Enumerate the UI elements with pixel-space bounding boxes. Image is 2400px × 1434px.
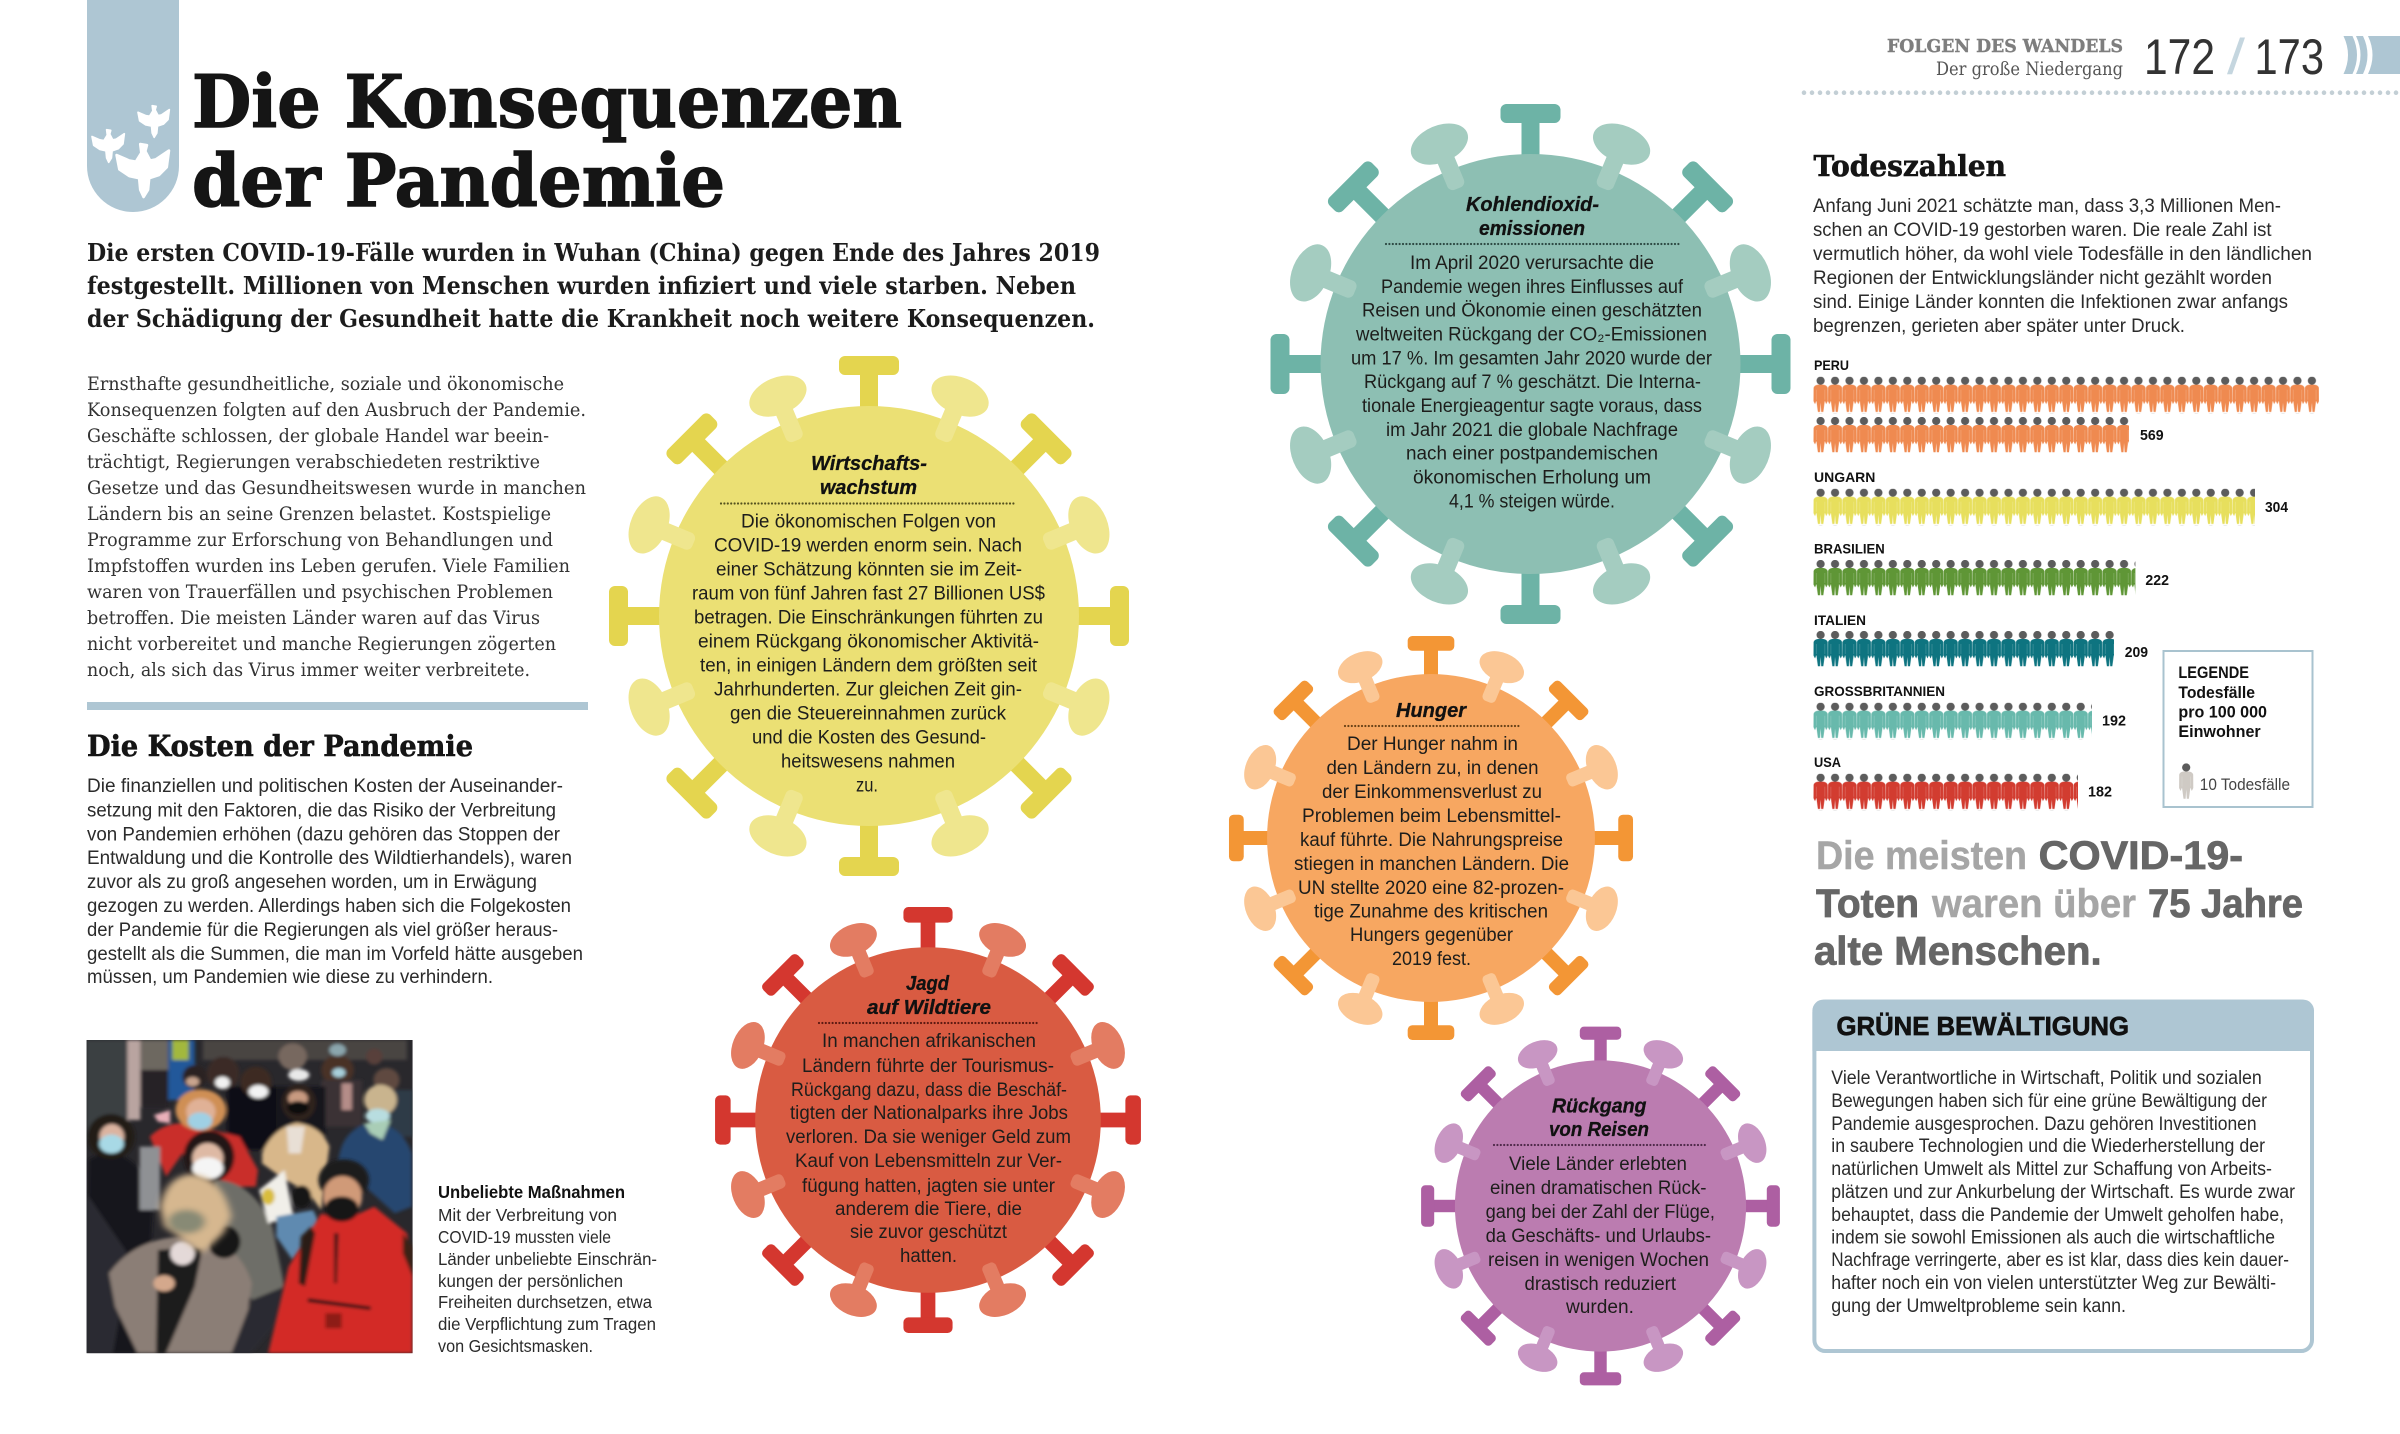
caption: Unbeliebte Maßnahmen: die Verpflichtung zum Tragen (438, 1314, 656, 1334)
virus text: Wirtschaftswachstum: zu. (856, 776, 878, 796)
virus text: Kohlendioxidemissionen: um 17 %. Im gesamten Jahr 2020 wurde der (1351, 348, 1713, 370)
pictogram chart: deaths per 100000 (1813, 357, 2319, 811)
panel text: gung der Umweltprobleme sein kann. (1831, 1296, 2126, 1317)
virus text: Jagd auf Wildtiere: Jagd (906, 973, 950, 995)
text: costs paragraph: von Pandemien erhöhen (dazu gehören das Stoppen der (87, 824, 560, 846)
panel: Grüne Bewältigung (1812, 1000, 2314, 1351)
text: costs paragraph: zuvor als zu groß angesehen worden, um in Erwägung (87, 871, 537, 893)
callout: oldest victims statement: alte Menschen. (1814, 930, 2102, 974)
virus text: Rückgang von Reisen: Viele Länder erlebten (1509, 1154, 1687, 1175)
virus text: Rückgang von Reisen: wurden. (1565, 1297, 1634, 1318)
virus text: Wirtschaftswachstum: gen die Steuereinnahmen zurück (730, 704, 1006, 724)
body paragraph: Programme zur Erforschung von Behandlungen und (87, 530, 553, 551)
caption: Unbeliebte Maßnahmen: Mit der Verbreitung von (438, 1205, 617, 1225)
row: Ungarn 304: UNGARN (1814, 469, 1875, 485)
caption: Unbeliebte Maßnahmen: von Gesichtsmasken. (438, 1336, 593, 1356)
caption: Unbeliebte Maßnahmen (438, 1182, 657, 1356)
virus text: Jagd auf Wildtiere (786, 973, 1071, 1267)
virus text: Jagd auf Wildtiere: Ländern führte der Tourismus- (802, 1056, 1054, 1077)
virus text: Kohlendioxidemissionen: Im April 2020 verursachte die (1410, 253, 1654, 274)
virus text: Jagd auf Wildtiere: fügung hatten, jagten sie unter (802, 1176, 1056, 1197)
body paragraph: nicht vorbereitet und manche Regierungen zögerten (87, 634, 556, 655)
virus panel: Hunger (1229, 636, 1633, 1040)
panel text: indem sie sowohl Emissionen als auch die wirtschaftliche (1831, 1228, 2275, 1249)
row: Grossbritannien 192 (1813, 683, 2126, 740)
row: USA 182: 182 (2088, 784, 2112, 801)
virus text: Hunger: stiegen in manchen Ländern. Die (1294, 854, 1569, 875)
virus text: Rückgang von Reisen: von Reisen (1549, 1119, 1649, 1141)
virus text: Jagd auf Wildtiere: In manchen afrikanischen (822, 1031, 1036, 1052)
text: costs paragraph: müssen, um Pandemien wie diese zu verhindern. (87, 966, 493, 988)
virus text: Wirtschaftswachstum: COVID-19 werden enorm sein. Nach (714, 536, 1022, 556)
heading: Die Kosten der Pandemie: Die Kosten der Pandemie (87, 729, 473, 763)
panel text: behauptet, dass die Pandemie der Umwelt geholfen habe, (1831, 1205, 2284, 1226)
caption: Unbeliebte Maßnahmen: Länder unbeliebte Einschrän- (438, 1249, 657, 1269)
text: costs paragraph (87, 775, 583, 988)
intro text (87, 238, 1100, 333)
caption: Unbeliebte Maßnahmen: kungen der persönlichen (438, 1271, 623, 1291)
page numbers: / (2227, 29, 2245, 85)
row: Brasilien 222 (1813, 540, 2169, 597)
virus text: Rückgang von Reisen (1486, 1096, 1715, 1318)
virus text: Rückgang von Reisen: drastisch reduziert (1524, 1274, 1677, 1295)
page header: running head: FOLGEN DES WANDELS (1887, 36, 2123, 57)
callout: oldest victims statement: Die meisten (1816, 834, 2027, 878)
virus text: Jagd auf Wildtiere: verloren. Da sie weniger Geld zum (786, 1127, 1071, 1148)
virus text: Jagd auf Wildtiere: sie zuvor geschützt (850, 1222, 1008, 1243)
virus text: Hunger: den Ländern zu, in denen (1326, 758, 1538, 779)
page header: running head (1887, 36, 2123, 80)
text: costs paragraph: setzung mit den Faktoren, die das Risiko der Verbreitung (87, 800, 556, 822)
text: Todeszahlen paragraph: sind. Einige Länder konnten die Infektionen zwar anfangs (1813, 291, 2288, 313)
panel text: Nachfrage verringerte, aber es ist klar, dass dies kein dauer- (1831, 1250, 2289, 1271)
icon: person legend (2179, 763, 2193, 799)
row: Ungarn 304 (1813, 469, 2289, 526)
virus text: Hunger: kauf führte. Die Nahrungspreise (1300, 830, 1563, 851)
virus text: Wirtschaftswachstum (692, 453, 1045, 796)
virus text: Hunger: Hungers gegenüber (1350, 925, 1514, 946)
heading: Todeszahlen: Todeszahlen (1814, 149, 2006, 183)
text: costs paragraph: gezogen zu werden. Allerdings haben sich die Folgekosten (87, 895, 571, 917)
row: Italien 209: 209 (2125, 644, 2148, 661)
virus text: Wirtschaftswachstum: Die ökonomischen Folgen von (741, 512, 996, 532)
virus text: Wirtschaftswachstum: und die Kosten des Gesund- (752, 728, 986, 748)
legend: LEGENDE (2178, 663, 2249, 682)
virus text: Rückgang von Reisen: da Geschäfts- und Urlaubs- (1486, 1226, 1711, 1247)
text: costs paragraph: Entwaldung und die Kontrolle des Wildtierhandels), waren (87, 847, 572, 869)
virus text: Wirtschaftswachstum: betragen. Die Einschränkungen führten zu (694, 608, 1043, 628)
virus text: Jagd auf Wildtiere: Kauf von Lebensmitteln zur Ver- (795, 1151, 1062, 1172)
virus text: Kohlendioxidemissionen: nach einer postpandemischen (1406, 444, 1658, 464)
body paragraph: betroffen. Die meisten Länder waren auf das Virus (87, 608, 540, 629)
virus text: Wirtschaftswachstum: Wirtschafts- (811, 453, 927, 475)
virus text: Kohlendioxidemissionen: tionale Energieagentur sagte voraus, dass (1362, 396, 1702, 417)
text: costs paragraph: gestellt als die Summen, die man im Vorfeld hätte ausgeben (87, 943, 583, 965)
body paragraph: Impfstoffen wurden ins Leben gerufen. Viele Familien (87, 556, 570, 577)
virus text: Kohlendioxidemissionen: Pandemie wegen ihres Einflusses auf (1381, 277, 1684, 298)
virus text: Hunger: Hunger (1396, 700, 1467, 722)
virus shape: purple (1421, 1027, 1780, 1385)
row: Brasilien 222: BRASILIEN (1814, 540, 1885, 556)
panel text: Bewegungen haben sich für eine grüne Bewältigung der (1831, 1091, 2268, 1112)
callout: oldest victims statement (1814, 834, 2303, 974)
page numbers: 172 (2144, 29, 2215, 85)
body paragraph: noch, als sich das Virus immer weiter verbreitete. (87, 660, 530, 681)
virus text: Kohlendioxidemissionen: im Jahr 2021 die globale Nachfrage (1386, 420, 1678, 441)
row: USA 182: USA (1814, 754, 1841, 770)
title: Die Konsequenzen (192, 59, 902, 144)
virus text: Rückgang von Reisen: reisen in wenigen Wochen (1488, 1250, 1709, 1271)
virus text: Rückgang von Reisen: gang bei der Zahl der Flüge, (1486, 1202, 1715, 1223)
row: Italien 209 (1813, 612, 2148, 668)
callout: oldest victims statement: 75 Jahre (2148, 882, 2303, 926)
caption: Unbeliebte Maßnahmen: Unbeliebte Maßnahmen (438, 1182, 625, 1202)
virus text: Hunger: Der Hunger nahm in (1347, 734, 1518, 755)
text: Todeszahlen paragraph: begrenzen, gerieten aber später unter Druck. (1813, 315, 2185, 337)
virus text: Hunger (1294, 700, 1569, 970)
virus text: Jagd auf Wildtiere: auf Wildtiere (867, 997, 991, 1019)
panel text: Pandemie ausgesprochen. Dazu gehören Investitionen (1831, 1114, 2257, 1135)
virus text: Wirtschaftswachstum: einer Schätzung könnten sie im Zeit- (716, 560, 1022, 580)
body paragraph (87, 374, 586, 681)
caption: Unbeliebte Maßnahmen: COVID-19 mussten viele (438, 1227, 611, 1247)
text: costs paragraph: der Pandemie für die Regierungen als viel größer heraus- (87, 919, 558, 941)
photo: crowd with face masks (87, 1040, 413, 1353)
virus text: Wirtschaftswachstum: heitswesens nahmen (781, 752, 955, 772)
virus shape: teal (1270, 104, 1790, 624)
panel text: hafter noch ein von vielen unterstützter Weg zur Bewälti- (1831, 1273, 2276, 1294)
text: Todeszahlen paragraph: Regionen der Entwicklungsländer nicht gezählt worden (1813, 267, 2272, 289)
intro text: der Schädigung der Gesundheit hatte die Krankheit noch weitere Konsequenzen. (87, 304, 1095, 333)
virus panel: Wirtschaftswachstum (609, 356, 1129, 876)
virus text: Kohlendioxidemissionen: emissionen (1479, 218, 1585, 240)
virus panel: Rückgang von Reisen (1421, 1027, 1780, 1385)
text: Todeszahlen paragraph: vermutlich höher, da wohl viele Todesfälle in den ländlichen (1813, 243, 2312, 265)
body paragraph: Konsequenzen folgten auf den Ausbruch der Pandemie. (87, 400, 586, 421)
virus text: Hunger: tige Zunahme des kritischen (1314, 902, 1548, 922)
virus text: Hunger: 2019 fest. (1392, 949, 1471, 970)
callout: oldest victims statement: waren über (1931, 882, 2136, 926)
virus text: Kohlendioxidemissionen: 4,1 % steigen würde. (1449, 492, 1615, 512)
body paragraph: waren von Trauerfällen und psychischen Problemen (87, 582, 553, 603)
virus panel: Jagd auf Wildtiere (715, 907, 1141, 1333)
virus text: Rückgang von Reisen: Rückgang (1552, 1096, 1646, 1118)
row: Peru 569: PERU (1814, 357, 1849, 373)
page header: running head: Der große Niedergang (1936, 58, 2123, 80)
virus text: Hunger: UN stellte 2020 eine 82-prozen- (1298, 878, 1564, 899)
virus text: Jagd auf Wildtiere: Rückgang dazu, dass die Beschäf- (791, 1080, 1067, 1101)
legend: Einwohner (2178, 722, 2261, 741)
panel text (1831, 1068, 2296, 1317)
virus shape: red (715, 907, 1141, 1333)
title (192, 59, 902, 223)
virus text: Wirtschaftswachstum: ten, in einigen Ländern dem größten seit (700, 656, 1038, 676)
icon: chevron page marker (2344, 36, 2400, 74)
row: Peru 569: 569 (2140, 427, 2164, 444)
virus text: Hunger: der Einkommensverlust zu (1322, 782, 1542, 803)
title: der Pandemie (192, 138, 725, 223)
virus panel: Kohlendioxidemissionen (1270, 104, 1790, 624)
callout: oldest victims statement: Toten (1816, 882, 1919, 926)
body paragraph: Ernsthafte gesundheitliche, soziale und ökonomische (87, 374, 564, 395)
virus text: Jagd auf Wildtiere: tigten der Nationalparks ihre Jobs (790, 1103, 1068, 1124)
virus text: Wirtschaftswachstum: wachstum (820, 477, 917, 499)
panel text: Viele Verantwortliche in Wirtschaft, Politik und sozialen (1831, 1068, 2262, 1089)
text: costs paragraph: Die finanziellen und politischen Kosten der Auseinander- (87, 775, 563, 797)
page numbers: 173 (2254, 29, 2324, 85)
virus text: Jagd auf Wildtiere: anderem die Tiere, die (835, 1199, 1022, 1220)
caption: Unbeliebte Maßnahmen: Freiheiten durchsetzen, etwa (438, 1292, 652, 1312)
row: Grossbritannien 192: GROSSBRITANNIEN (1814, 683, 1945, 699)
virus shape: yellow (609, 356, 1129, 876)
row: USA 182 (1813, 754, 2112, 811)
legend: pro 100 000 (2178, 703, 2267, 722)
page numbers (2144, 29, 2324, 85)
panel text: in saubere Technologien und die Wiederherstellung der (1831, 1136, 2266, 1157)
virus shape: orange (1229, 636, 1633, 1040)
callout: oldest victims statement: COVID-19- (2039, 834, 2243, 878)
intro text: festgestellt. Millionen von Menschen wurden infiziert und viele starben. Neben (87, 271, 1076, 300)
body paragraph: Gesetze und das Gesundheitswesen wurde in manchen (87, 478, 586, 499)
icon: doves tab (87, 0, 179, 212)
legend: Todesfälle (2178, 683, 2255, 702)
body paragraph: Ländern bis an seine Grenzen belastet. Kostspielige (87, 504, 551, 525)
virus text: Wirtschaftswachstum: raum von fünf Jahren fast 27 Billionen US$ (692, 584, 1045, 604)
row: Italien 209: ITALIEN (1814, 612, 1866, 628)
virus text: Wirtschaftswachstum: einem Rückgang ökonomischer Aktivitä- (698, 632, 1039, 652)
virus text: Kohlendioxidemissionen (1351, 194, 1713, 512)
virus text: Wirtschaftswachstum: Jahrhunderten. Zur gleichen Zeit gin- (714, 680, 1022, 700)
virus text: Kohlendioxidemissionen: ökonomischen Erholung um (1413, 468, 1651, 488)
text: Todeszahlen paragraph: schen an COVID-19 gestorben waren. Die reale Zahl ist (1813, 219, 2272, 241)
legend (2164, 651, 2312, 807)
body paragraph: trächtigt, Regierungen verabschiedeten restriktive (87, 452, 540, 473)
intro text: Die ersten COVID-19-Fälle wurden in Wuhan (China) gegen Ende des Jahres 2019 (87, 238, 1100, 267)
panel text: natürlichen Umwelt als Mittel zur Schaffung von Arbeits- (1831, 1159, 2272, 1180)
row: Brasilien 222: 222 (2145, 572, 2169, 589)
legend: 10 Todesfälle (2200, 775, 2290, 794)
virus text: Kohlendioxidemissionen: Reisen und Ökonomie einen geschätzten (1362, 300, 1702, 322)
row: Ungarn 304: 304 (2265, 499, 2289, 516)
panel heading: GRÜNE BEWÄLTIGUNG (1836, 1011, 2129, 1041)
panel text: plätzen und zur Ankurbelung der Wirtschaft. Es wurde zwar (1831, 1182, 2296, 1203)
text: Todeszahlen paragraph: Anfang Juni 2021 schätzte man, dass 3,3 Millionen Men- (1813, 195, 2281, 217)
row: Grossbritannien 192: 192 (2102, 713, 2126, 730)
virus text: Jagd auf Wildtiere: hatten. (900, 1246, 957, 1267)
virus text: Rückgang von Reisen: einen dramatischen Rück- (1490, 1178, 1706, 1199)
virus text: Kohlendioxidemissionen: Rückgang auf 7 % geschätzt. Die Interna- (1364, 372, 1701, 393)
virus text: Kohlendioxidemissionen: Kohlendioxid- (1466, 194, 1599, 216)
virus text: Hunger: Problemen beim Lebensmittel- (1302, 806, 1561, 827)
body paragraph: Geschäfte schlossen, der globale Handel war beein- (87, 426, 549, 447)
virus text: Kohlendioxidemissionen: weltweiten Rückgang der CO₂-Emissionen (1355, 324, 1707, 346)
text: Todeszahlen paragraph (1813, 195, 2312, 337)
row: Peru 569 (1813, 357, 2319, 454)
